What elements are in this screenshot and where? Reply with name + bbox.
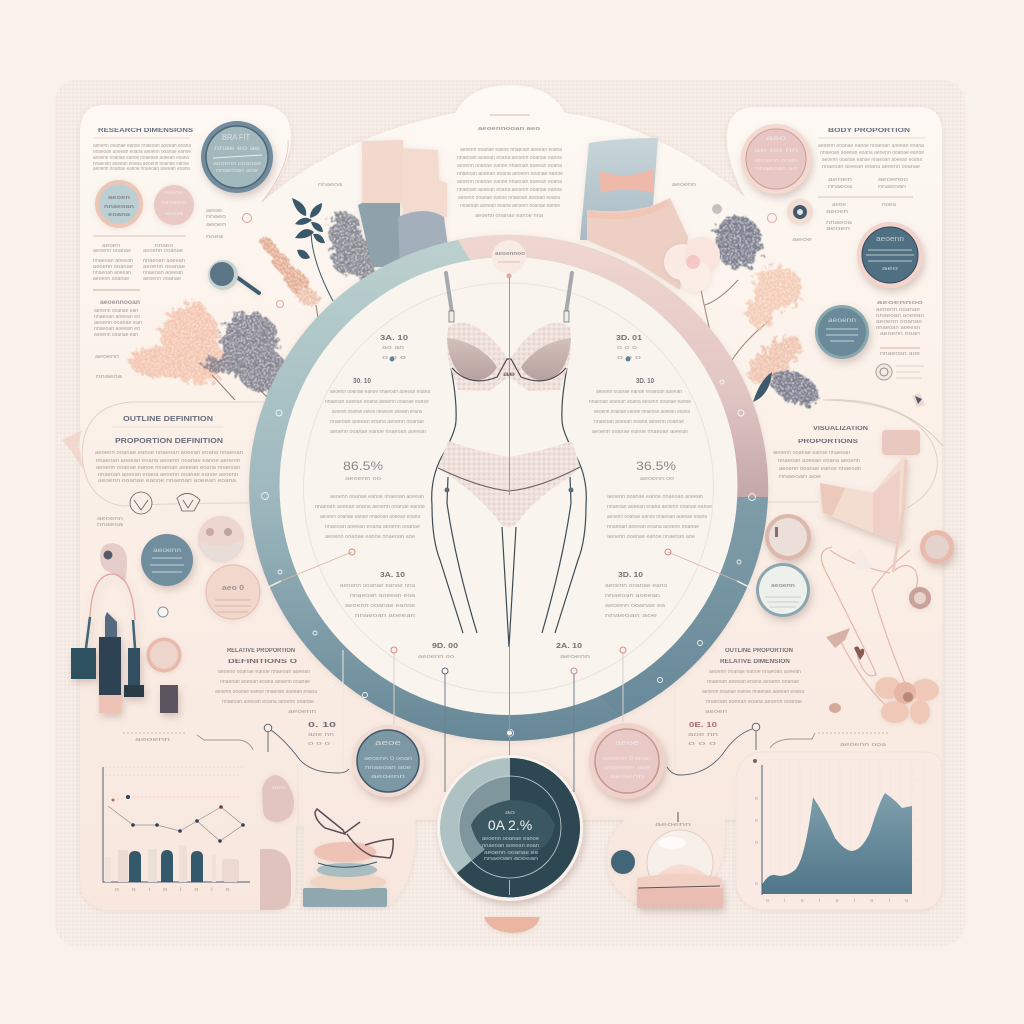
- panel: top center text: aeoenn ooanae eanoe nnaeoan aoeean eoana: [457, 179, 562, 185]
- panel: top-left text and badges: aeoennooan: [100, 300, 140, 306]
- connector: left: [123, 724, 349, 773]
- badge: bottom right pink: aeoe: [615, 740, 639, 747]
- panel: right chart: o: [755, 881, 758, 887]
- text blocks: inside circle left: 9D. 00: [432, 643, 458, 650]
- text blocks: inside circle right: aeoenn ooanae ea: [605, 603, 665, 609]
- panel: top-left text and badges: aeoenn: [95, 354, 119, 360]
- panel: top-right text and badges: nnaeoan aoe: [880, 351, 920, 357]
- connectors from circle to badges: [258, 549, 757, 792]
- necklace: [821, 547, 918, 705]
- area chart: [762, 793, 912, 894]
- text blocks: inside circle right: o o o: [617, 345, 637, 351]
- panel: right mid callout: nnaeoan aoe: [779, 474, 821, 480]
- panel: left chart: [103, 765, 298, 910]
- badge: blue: aeoenn: [153, 548, 181, 554]
- panel: top-left text and badges: RESEARCH DIMENSIONS: [98, 128, 193, 134]
- badge: large pink: ae oo nn: [754, 148, 798, 154]
- badge: small ring: [909, 587, 931, 609]
- icon: small pink bowl: [484, 917, 540, 933]
- donut chart: bottom center: 0A 2.%: [488, 817, 532, 833]
- text blocks: inside circle left: aeoenn oo: [418, 654, 454, 660]
- panel: top-left text and badges: aeoenn ooanae eanoe nnaeoan aoeean eoana: [93, 143, 191, 149]
- panel: top-right text and badges: aeoenn ooan: [880, 331, 920, 337]
- panel: top-left text and badges: nnaeoan aoeean: [93, 270, 131, 276]
- text blocks: inside circle left: 30. 10: [353, 378, 371, 385]
- badge: bottom left blue: aeoenn 0 ooan: [364, 756, 412, 762]
- text blocks: inside circle left: 3A. 10: [380, 572, 405, 579]
- text blocks: inside circle left: aeoenn ooanae eanoe nnaeoan aoe: [325, 534, 415, 540]
- text block: lower right: aeoen: [705, 709, 727, 715]
- panel: top-right text and badges: nnaeoa: [828, 184, 852, 190]
- icon: magnifier: [208, 260, 259, 293]
- panel: top-right text and badges: aeoen: [826, 209, 848, 215]
- plant: grey sprig: [329, 212, 376, 286]
- text blocks: inside circle right: aeoenn ooanae eanoe nnaeoan aoeean eoana: [594, 409, 690, 415]
- badge: large blue: nnaeoan aoe: [216, 168, 258, 174]
- panel: left mid callout: aeoenn ooanae eanoe nnaeoan aoeean eoana: [98, 478, 236, 484]
- panel: top-right text and badges: aeoenn ooanae: [876, 319, 922, 325]
- text block: lower right: 0E. 10: [689, 722, 717, 729]
- panel: top-left text and badges: nnaeo: [206, 214, 226, 220]
- panel: top-right text and badges: noea: [882, 202, 896, 208]
- badge: bottom left blue: aeoenn: [371, 774, 405, 780]
- panel: right mid callout: nnaeoan aoeean eoana aeoenn: [778, 458, 860, 464]
- panel: top-right text and badges: nnaeoan aoeean: [876, 325, 920, 331]
- panel: left chart: aeo: [272, 785, 286, 791]
- panties: [438, 441, 580, 528]
- illustration: glasses on stacked cushions: [303, 809, 393, 907]
- text blocks: inside circle right: aeoenn ooanae eano: [605, 583, 667, 589]
- badge: small pink: nnaeo: [162, 200, 186, 206]
- main cream panel: [80, 85, 942, 910]
- text block: lower left: [215, 648, 343, 770]
- badge: large blue: aeoenn ooanae: [213, 161, 261, 167]
- text blocks: inside circle left: nnaeoan aoeean eoana aeoenn ooanae: [325, 524, 420, 530]
- figure: lingerie on body outline: ae: [503, 372, 516, 378]
- illustration: glass jar: [611, 812, 723, 908]
- text block: lower left: aeoenn ooanae eanoe nnaeoan aoeean eoana: [215, 689, 317, 695]
- text blocks: inside circle right: o o o: [617, 355, 641, 361]
- panel: top-left text and badges: aeoenn ooanae: [93, 276, 129, 282]
- panel: top-left text and badges: nnaeoa: [318, 182, 342, 188]
- panel: top-left text and badges: nnaeoan aoeean eo: [94, 326, 140, 332]
- panel: top center text: nnaeoan aoeean eoana aeoenn ooanae eanoe: [457, 187, 562, 193]
- stack: [303, 842, 387, 907]
- text blocks: inside circle right: nnaeoan aoeean eoana aeoenn ooanae: [594, 419, 684, 425]
- text blocks: inside circle right: 36.5%: [636, 459, 676, 473]
- badge: bottom left blue: nnaeoan aoe: [365, 765, 411, 771]
- donut chart: bottom center: ao: [505, 810, 515, 816]
- icon: seal with note: [876, 364, 924, 380]
- badge: pale blue ringed: [756, 563, 810, 617]
- panel: top-right text and badges: nnaeoan: [878, 184, 906, 190]
- badges: right side: [756, 514, 954, 617]
- badge: dark blue: aeoenn: [876, 236, 904, 243]
- panel: top-left text and badges: nnaeoan aoeean: [143, 258, 185, 264]
- panel: top-right text and badges: aeoe: [832, 202, 846, 208]
- illustration: left plumes: [129, 198, 376, 400]
- badge: dark blue: aeo: [882, 266, 898, 272]
- icon: small ring: [787, 199, 813, 225]
- text block: lower right: RELATIVE DIMENSION: [720, 659, 790, 665]
- badge: large pink: aeoenn ooan: [755, 158, 797, 164]
- bra straps: [446, 273, 572, 322]
- chart grid: [762, 760, 924, 896]
- text block: lower left: aeoenn: [288, 709, 316, 715]
- text block: lower right: nnaeoan aoeean eoana aeoenn ooanae: [706, 699, 802, 705]
- badge: bottom left blue: [352, 725, 424, 797]
- text blocks: inside circle right: [556, 335, 712, 660]
- textured backing panel: [55, 80, 965, 946]
- panel: left mid callout: aeoenn ooanae eanoe nnaeoan aoeean eoana nnaeoan: [96, 465, 240, 471]
- text blocks: inside circle left: nnaeoan aoeean: [355, 613, 415, 619]
- panel: left mid callout: aeoenn ooanae eanoe nnaeoan aoeean eoana nnaeoan: [95, 450, 243, 456]
- plume: grey lower: [766, 364, 824, 412]
- panel: top-left text and badges: nnaeoan aoeean: [143, 270, 183, 276]
- panel: top-right text and badges: aeoen: [828, 177, 852, 183]
- badge: pink ringed: aeo 0: [222, 585, 244, 592]
- badge: bottom left blue: aeoe: [375, 740, 401, 747]
- icon: pink teardrop tag: [100, 543, 127, 582]
- text blocks: inside circle left: 86.5%: [343, 459, 383, 473]
- badge: small pink: eoa: [165, 211, 183, 217]
- badge: pale pink: [198, 516, 244, 562]
- icon: lipstick set: [71, 574, 178, 713]
- panel: right mid callout: aeoenn ooanae eanoe nnaeoan: [779, 466, 861, 472]
- text block: lower left: aoe nn: [308, 732, 334, 738]
- badge: large blue: [201, 121, 273, 193]
- text blocks: inside circle right: nnaeoan aoeean eoana aeoenn ooanae eanoe: [607, 504, 712, 510]
- text block: lower right: o o o: [688, 741, 717, 747]
- panel: top-left text and badges: nnaeoa: [96, 374, 122, 380]
- panel: right mid callout: PROPORTIONS: [798, 439, 858, 445]
- panel: top-left text and badges: nnaeoan aoeean eo: [94, 314, 140, 320]
- text blocks: inside circle left: nnaeoan aoeean eoa: [350, 593, 415, 599]
- text block: lower left: aeoenn ooanae eanoe nnaeoan aoeean: [218, 669, 310, 675]
- panel: top-right text and badges: [712, 124, 925, 407]
- figure: lingerie on body outline: [432, 273, 586, 647]
- panel: top center text: nnaeoan aoeean eoana aeoenn ooanae eanoe: [457, 155, 562, 161]
- panel: right chart: o: [755, 818, 758, 824]
- text blocks: inside circle right: nnaeoan aoeean: [605, 593, 660, 599]
- illustration: glass jar: aeoenn: [655, 822, 691, 828]
- text blocks: inside circle left: [315, 335, 458, 660]
- panel: left cosmetics and badges: [71, 516, 260, 713]
- panel: right mid callout: [768, 400, 937, 508]
- panel: left mid callout: aeoenn: [97, 516, 123, 522]
- panel: top-right text and badges: aeoenn ooanae eanoe nnaeoan aoeean eoana: [822, 157, 922, 163]
- text block: lower right: aeoenn ooanae eanoe nnaeoan aoeean: [709, 669, 801, 675]
- badge: large pink: nnaeoan ao: [755, 166, 797, 172]
- panel: left mid callout: PROPORTION DEFINITION: [115, 438, 223, 445]
- text blocks: inside circle left: nnaeoan aoeean eoana aeoenn ooanae eanoe: [325, 399, 429, 405]
- panel: top-left text and badges: aeoenn ooanae ean: [94, 320, 142, 326]
- badge: pale blue ringed: aeoenn: [771, 583, 795, 589]
- panel: right mid callout: aeoenn ooanae eanoe nnaeoan: [773, 450, 850, 456]
- text blocks: inside circle left: aeoenn ooanae eanoe nna: [340, 583, 415, 589]
- panel: top-right text and badges: nnaeoan aoeean: [876, 313, 924, 319]
- panel: top center text: nnaeoan aoeean eoana aeoenn ooanae eanoe: [457, 171, 563, 177]
- flower: [875, 677, 939, 724]
- plume: pink pod: [257, 233, 319, 306]
- badge: small blue with peach border: aeoen: [108, 195, 130, 201]
- text block: lower left: nnaeoan aoeean eoana aeoenn ooanae: [222, 699, 314, 705]
- fabric: [820, 457, 907, 543]
- panel: top-left text and badges: nnaeoan aoeean eoana aeoenn ooanae eanoe: [93, 149, 191, 155]
- badge: blue: [141, 534, 193, 586]
- panel: left mid callout: OUTLINE DEFINITION: [123, 416, 213, 423]
- panel: top-left text and badges: aeoenn ooanae ean: [94, 332, 138, 338]
- badge: small pink: [154, 185, 194, 225]
- stone tag: [262, 775, 294, 822]
- badge: large pink: [741, 124, 811, 194]
- panel: top-left text and badges: aeoen: [206, 222, 226, 228]
- panel: top-right text and badges: aeoenn ooanae: [876, 307, 920, 313]
- text blocks: inside circle left: aeoenn ooanae eanoe nnaeoan aoeean: [330, 429, 426, 435]
- badge: large blue: BRA FIT: [222, 133, 250, 142]
- panel: left mid callout: nnaeoa: [97, 522, 123, 528]
- badge: grey pink: [765, 514, 811, 560]
- text blocks: inside circle left: aeoenn ooanae eanoe: [345, 603, 415, 609]
- text blocks: inside circle right: 3D. 10: [636, 378, 654, 385]
- text blocks: inside circle right: aeoenn ooanae eanoe nnaeoan aoeean: [596, 389, 682, 395]
- panel: right mid callout: VISUALIZATION: [813, 426, 868, 432]
- text blocks: inside circle right: aeoenn ooanae eanoe nnaeoan aoeean eoana: [607, 514, 707, 520]
- panel: top-left text and badges: aeoenn ooanae eanoe nnaeoan aoeean eoana: [93, 166, 190, 172]
- text blocks: inside circle right: 2A. 10: [556, 643, 582, 650]
- text block: lower right: nnaeoan aoeean eoana aeoenn ooanae: [707, 679, 799, 685]
- panel: right chart: o: [755, 840, 758, 846]
- bra: [447, 323, 571, 391]
- panel: right chart: o: [755, 796, 758, 802]
- badge: small blue with peach border: [95, 180, 143, 228]
- illustration: top-left garment: [358, 140, 449, 270]
- panel: top-right text and badges: aeoenoo: [878, 177, 908, 183]
- panel: top-left text and badges: aeoenn ooanae eanoe nnaeoan aoeean eoana: [93, 155, 189, 161]
- donut chart: bottom center: nnaeoan aoeean: [484, 856, 538, 862]
- text blocks: inside circle right: aeoenn oo: [640, 476, 674, 482]
- text blocks: inside circle right: nnaeoan aoeean eoana aeoenn ooanae eanoe: [589, 399, 691, 405]
- badge: small blue: [611, 850, 635, 874]
- text blocks: inside circle left: o o o: [382, 355, 406, 361]
- plant: dark leaves: [292, 198, 333, 301]
- text blocks: inside circle left: aeoenn ooanae eanoe nnaeoan aoeean eoana: [330, 389, 430, 395]
- panel: top center text: aeoenn ooanae eanoe nnaeoan aoeean eoana: [457, 163, 562, 169]
- panel: top center text: nnaeoan aoeean eoana aeoenn ooanae eanoe: [460, 203, 560, 209]
- badge: small pink: aeoe: [164, 190, 184, 196]
- badge: bottom right pink: nnaeoan aoe: [604, 765, 650, 771]
- text blocks: inside circle right: 3D. 01: [616, 335, 642, 342]
- panel: top center text: aeoenn ooanae eanoe nnaeoan aoeean eoana: [460, 147, 562, 153]
- panel: right chart: [736, 752, 942, 910]
- badge: bottom right pink: aeoenn: [610, 774, 644, 780]
- panel: top-right text and badges: nnaeoa: [826, 220, 852, 226]
- text block: lower left: o o o: [308, 741, 330, 747]
- panel: top-left text and badges: aeoenn ooanae: [143, 248, 183, 254]
- text blocks: inside circle left: aeoenn ooanae eanoe nnaeoan aoeean: [330, 494, 424, 500]
- connector: right: aeoenn ooa: [840, 742, 886, 748]
- text block: lower left: RELATIVE PROPORTION: [227, 648, 295, 654]
- panel: top-right text and badges: aeoe: [792, 237, 812, 243]
- panel: right chart: o i o i o i o i o: [766, 898, 912, 904]
- text block: lower right: [675, 648, 804, 770]
- glasses: [315, 809, 393, 858]
- panel: top-right text and badges: aeoennoo: [877, 300, 923, 306]
- label: top of circle: [492, 240, 526, 278]
- panel: top-left text and badges: aeoenn ooanae ean: [94, 308, 138, 314]
- connector: right: [667, 723, 890, 775]
- panel: top center text: aeoenn ooanae eanoe nna: [475, 213, 543, 219]
- badge: small blue with peach border: nnaeoan: [104, 204, 134, 210]
- panel: top-left text and badges: aeoenn ooanae: [143, 276, 181, 282]
- badge: large blue: nnae eo ae: [214, 146, 261, 152]
- panel: left chart: o o i o i o i o: [115, 887, 235, 893]
- text block: lower right: aoe nn: [688, 732, 718, 738]
- panel: top center text: aeoennooan aeo: [478, 126, 540, 132]
- panel: top center text: aeoenn ooanae eanoe nnaeoan aoeean eoana: [458, 195, 560, 201]
- panel: top-right text and badges: BODY PROPORTION: [828, 128, 910, 134]
- text blocks: inside circle left: 3A. 10: [380, 335, 408, 342]
- bars: [105, 845, 239, 882]
- panel: top-left text and badges: noea: [206, 234, 223, 240]
- text block: lower left: DEFINITIONS O: [228, 659, 298, 665]
- body outline: [432, 368, 586, 647]
- donut chart: bottom center: aeoenn ooanae eanoe: [482, 836, 539, 842]
- tag: [882, 430, 920, 455]
- badge: medium blue: [815, 305, 869, 359]
- text blocks: inside circle left: nnaeoan aoeean eoana aeoenn ooanae eanoe: [315, 504, 425, 510]
- panel: top-left text and badges: aeoenn ooanae: [93, 264, 133, 270]
- flower: white: [664, 237, 720, 292]
- donut chart: bottom center: aeoenn ooanae ea: [484, 850, 538, 856]
- text blocks: inside circle right: nnaeoan aoeean eoana aeoenn ooanae: [607, 524, 699, 530]
- axes: [103, 767, 250, 882]
- badge: medium blue: aeoenn: [828, 318, 856, 324]
- panel: top-left text and badges: [93, 121, 342, 380]
- badge: dark blue: [857, 222, 923, 288]
- panel: top-left text and badges: aeoenn ooanae: [143, 264, 185, 270]
- text block: lower left: nnaeoan aoeean eoana aeoenn ooanae: [220, 679, 310, 685]
- panel: top-right text and badges: aeoenn ooanae eanoe nnaeoan aoeean eoana: [818, 143, 924, 149]
- icons: sketched garments: [130, 492, 200, 514]
- badge: small blue with peach border: eoana: [108, 212, 130, 218]
- panel: left mid callout: nnaeoan aoeean eoana aeoenn ooanae eanoe aeoenn: [98, 472, 238, 478]
- text blocks: inside circle left: aeoenn ooanae eanoe nnaeoan aoeean eoana: [332, 409, 422, 415]
- panel: top-left text and badges: aeoe: [206, 208, 222, 214]
- text blocks: inside circle left: ao an: [382, 345, 404, 351]
- panel: top-right text and badges: nnaeoan aoeean eoana aeoenn ooanae eanoe: [820, 150, 924, 156]
- badge: bottom right pink: aeoenn 0 ooan: [603, 756, 651, 762]
- panel: top-left text and badges: aeoenn ooanae: [93, 248, 131, 254]
- text blocks: inside circle left: aeoenn ooanae eanoe nnaeoan aoeean eoana: [320, 514, 420, 520]
- badge: small coral: [146, 638, 182, 672]
- text blocks: inside circle right: aeoenn ooanae eanoe nnaeoan aoe: [607, 534, 695, 540]
- connector: left: aeoenn: [135, 737, 170, 743]
- panel: left mid callout: nnaeoan aoeean eoana aeoenn ooanae eanoe aeoenn: [96, 458, 240, 464]
- text blocks: inside circle right: aeoenn ooanae eanoe nnaeoan aoeean: [607, 494, 703, 500]
- small ring dot: [158, 607, 168, 617]
- panel: top-right text and badges: nnaeoan aoeean eoana aeoenn ooanae: [822, 164, 920, 170]
- text blocks: inside circle left: nnaeoan aoeean eoana aeoenn ooanae: [330, 419, 424, 425]
- chart: pink side tab: [260, 849, 291, 910]
- text blocks: inside circle right: aeoenn ooanae eanoe nnaeoan aoeean: [592, 429, 688, 435]
- label: top of circle: aeoennoo: [495, 251, 525, 257]
- panel: top center text: [457, 115, 563, 219]
- badge: bottom right pink: [589, 723, 665, 799]
- illustration: right flowers and plumes: [664, 216, 943, 446]
- panel: top-right text and badges: aeoen: [826, 226, 850, 232]
- line chart: [105, 767, 245, 843]
- text block: lower left: 0. 10: [308, 722, 336, 729]
- text block: lower right: aeoenn ooanae eanoe nnaeoan aoeean eoana: [702, 689, 804, 695]
- badge: small coral: [920, 530, 954, 564]
- badge: large pink: aeo: [766, 136, 787, 142]
- text blocks: inside circle right: 3D. 10: [618, 572, 643, 579]
- panel: top-left text and badges: nnaeoan aoeean: [93, 258, 133, 264]
- text block: lower right: OUTLINE PROPORTION: [725, 648, 793, 654]
- panel: top-left text and badges: aeoen: [102, 243, 120, 249]
- panel: top-left text and badges: nnaeo: [155, 243, 173, 249]
- badge: pink ringed: [206, 565, 260, 619]
- illustration: top-right garments: [580, 138, 696, 290]
- donut chart: bottom center: nnaeoan aoeean eoan: [482, 843, 539, 849]
- chart ring: blue and pink segments: [249, 235, 768, 741]
- text blocks: inside circle left: aeoenn oo: [345, 476, 381, 482]
- illustration: top-right garments: aeoenn: [672, 182, 696, 188]
- text blocks: inside circle right: aeoenn: [560, 654, 590, 660]
- panel: top-left text and badges: nnaeoan aoeean eoana aeoenn ooanae eanoe: [93, 161, 189, 167]
- text blocks: inside circle right: nnaeoan aoe: [605, 613, 657, 619]
- illustration: garment, tag, necklace and flower: [820, 430, 939, 724]
- donut chart: bottom center: [437, 755, 583, 901]
- panel: left mid callout: [62, 402, 265, 528]
